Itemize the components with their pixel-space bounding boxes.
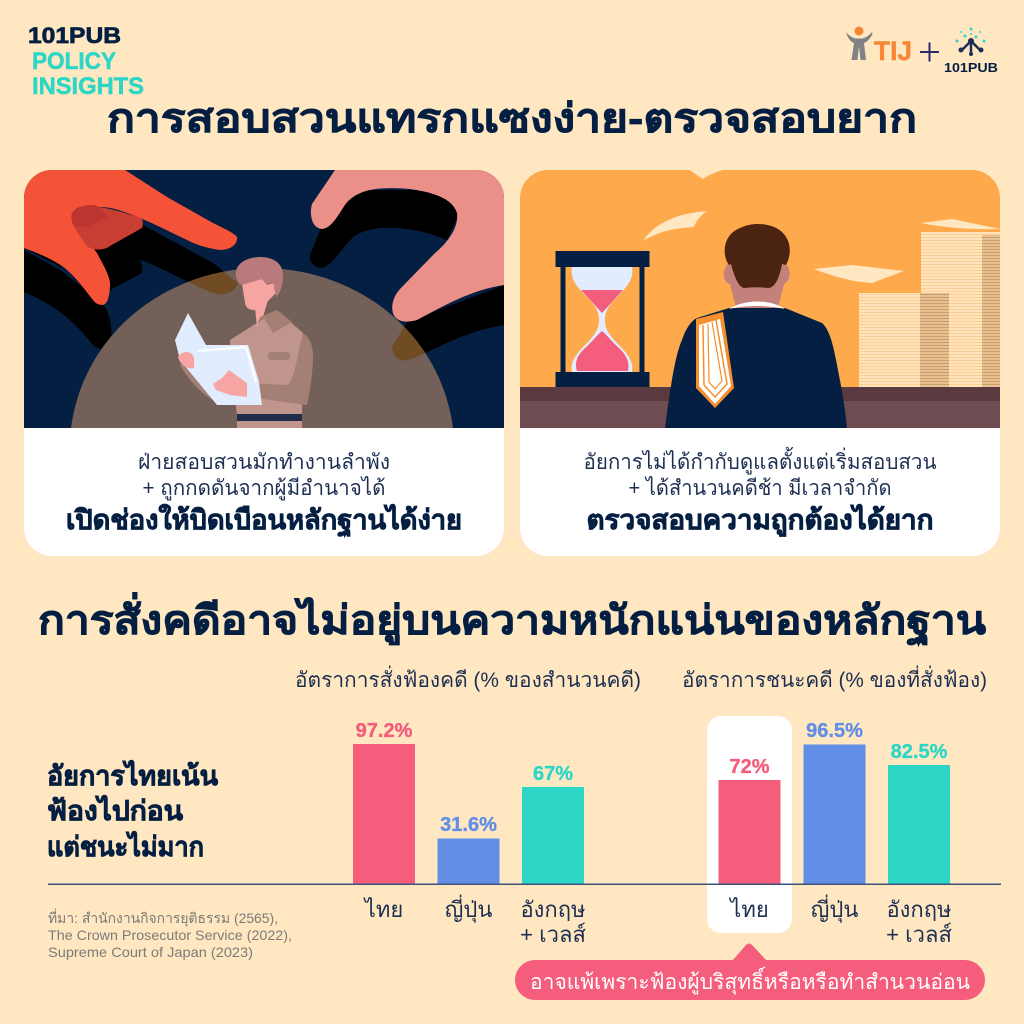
bar: England and Wales 82.5%: 82.5% (891, 741, 948, 763)
bar: Thailand 97.2%: 97.2% (356, 720, 413, 742)
source note: Supreme Court of Japan (2023) (48, 944, 253, 960)
icon: TIJ figure (846, 26, 872, 60)
category labels: ญี่ปุ่น (811, 894, 858, 923)
hair (236, 257, 283, 297)
right hand shadow (310, 190, 504, 360)
logo: 101PUB Policy Insights (28, 23, 144, 100)
paper stacks (859, 232, 1000, 387)
dome overlap (188, 272, 426, 360)
spotlight dome (71, 268, 453, 428)
sash (696, 312, 734, 408)
panel text: ตรวจสอบความถูกต้องได้ยาก (586, 504, 934, 537)
bar: Thailand 72%: 72% (729, 756, 770, 778)
pants (237, 421, 302, 428)
side takeaway text: ฟ้องไปก่อน (47, 795, 184, 826)
category labels: + เวลส์ (520, 922, 586, 947)
officer (175, 257, 313, 428)
panel text (584, 447, 936, 537)
arm behind documents (180, 364, 212, 400)
chart subtitle: conviction rate: อัตราการชนะคดี (% ของที่สั่งฟ้อง) (682, 665, 987, 692)
belt (237, 414, 302, 421)
bar: Japan 96.5%: 96.5% (806, 720, 863, 742)
category labels (363, 894, 952, 947)
bar: England and Wales 67%: 67% (533, 763, 573, 785)
category labels: ญี่ปุ่น (445, 894, 492, 923)
callout (515, 944, 985, 1000)
title: การสอบสวนแทรกแซงง่าย-ตรวจสอบยาก (107, 97, 917, 141)
panel text: เปิดช่องให้บิดเบือนหลักฐานได้ง่าย (66, 504, 462, 538)
logo: 101PUB Policy Insights: 101PUB (28, 23, 121, 48)
logo: TIJ + 101PUB: TIJ (874, 36, 912, 66)
neck and ears (724, 264, 790, 308)
gown (665, 308, 847, 428)
category labels: + เวลส์ (886, 922, 952, 947)
source note (48, 909, 292, 960)
logo: 101PUB Policy Insights: POLICY (32, 48, 116, 75)
documents (175, 313, 262, 405)
logo: 101PUB Policy Insights: INSIGHTS (32, 73, 144, 100)
illustration: officer under pressure from hands (24, 170, 504, 428)
section heading: การสั่งคดีอาจไม่อยู่บนความหนักแน่นของหลักฐาน (38, 592, 986, 647)
bar: England and Wales 82.5% (888, 741, 950, 884)
panel text: ฝ่ายสอบสวนมักทำงานลำพัง (138, 451, 390, 474)
hands (178, 352, 194, 369)
panel text: + ได้สำนวนคดีช้า มีเวลาจำกัด (628, 476, 892, 500)
face (242, 279, 277, 310)
logo: TIJ + 101PUB (846, 26, 998, 75)
panel: prosecutors (520, 169, 1000, 556)
hourglass (556, 251, 650, 387)
side takeaway text: แต่ชนะไม่มาก (47, 831, 204, 862)
callout: อาจแพ้เพราะฟ้องผู้บริสุทธิ์หรือหรือทำสำนวนอ่อน (530, 966, 970, 995)
bar: Thailand 97.2% (353, 720, 415, 884)
left hand shadow (24, 225, 238, 349)
red hand (24, 170, 237, 305)
sleeve (259, 333, 314, 405)
highlight: Thailand conviction rate (707, 716, 792, 933)
panel card (24, 170, 504, 556)
logo: TIJ + 101PUB: 101PUB (944, 60, 998, 75)
hair (725, 224, 790, 288)
bar: Japan 31.6%: 31.6% (440, 814, 497, 836)
desk (520, 387, 1000, 401)
flying papers (643, 211, 1000, 283)
bar: Thailand 72% (718, 756, 780, 884)
panel text (66, 451, 462, 538)
prosecutor (665, 224, 847, 428)
panel card (520, 170, 1000, 556)
panel text: อัยการไม่ได้กำกับดูแลตั้งแต่เริ่มสอบสวน (584, 447, 936, 475)
illustration: prosecutor, hourglass and paper stacks (520, 169, 1000, 428)
bar: Japan 96.5% (804, 720, 866, 884)
bar chart: prosecution rate (353, 720, 584, 884)
source note: ที่มา: สำนักงานกิจการยุติธรรม (2565), (48, 909, 278, 927)
panel: investigators (24, 170, 504, 556)
collar (257, 310, 292, 333)
shirt pocket (268, 352, 290, 360)
category labels: ไทย (728, 897, 769, 922)
top notch (690, 170, 722, 179)
side takeaway text (47, 760, 219, 862)
category labels: ไทย (363, 897, 403, 922)
bar: England and Wales 67% (522, 763, 584, 884)
source note: The Crown Prosecutor Service (2022), (48, 927, 292, 943)
collar (729, 302, 785, 309)
category labels: อังกฤษ (886, 897, 952, 922)
bar: Japan 31.6% (438, 814, 500, 884)
shirt (230, 310, 303, 414)
side takeaway text: อัยการไทยเน้น (47, 760, 219, 791)
pink hand (311, 170, 504, 322)
chart subtitle: prosecution rate: อัตราการสั่งฟ้องคดี (% ของสำนวนคดี) (295, 665, 641, 692)
neck (255, 300, 268, 327)
bar chart: conviction rate (718, 720, 950, 884)
category labels: อังกฤษ (520, 897, 586, 922)
icon: 101PUB network (956, 28, 986, 56)
panel text: + ถูกกดดันจากผู้มีอำนาจได้ (142, 476, 386, 501)
